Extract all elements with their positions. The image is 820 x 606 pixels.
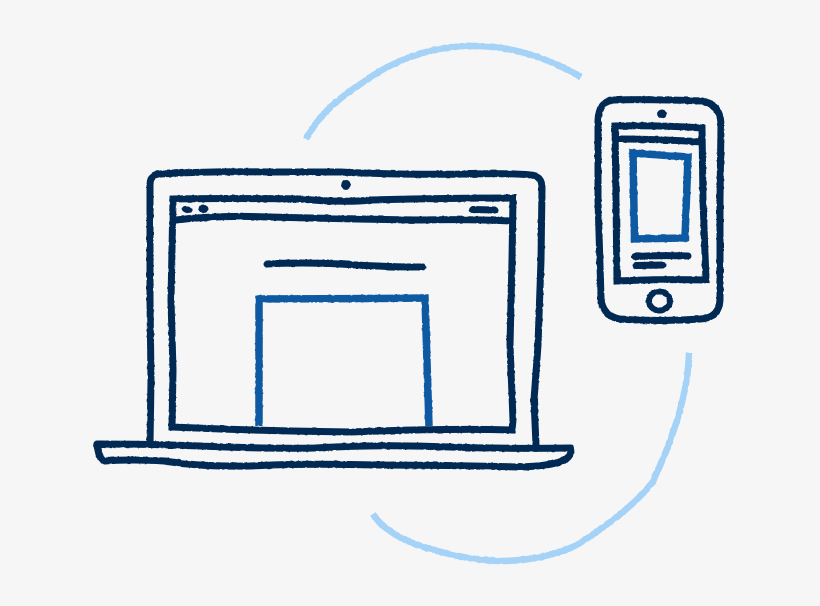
webcam <box>341 180 351 190</box>
button dot 1 <box>181 205 193 214</box>
browser menu bar <box>472 206 495 214</box>
phone title bar line <box>619 139 702 142</box>
phone screen frame <box>615 126 706 281</box>
browser buttons <box>181 205 208 214</box>
laptop <box>97 172 571 467</box>
artwork <box>97 46 721 561</box>
home button <box>649 292 670 310</box>
phone speaker dot <box>657 110 667 118</box>
blue image placeholder <box>633 153 688 239</box>
text line 1 <box>635 252 688 260</box>
headline line <box>267 263 423 267</box>
text line 2 <box>636 262 663 269</box>
browser title bar line <box>176 216 511 221</box>
laptop lid <box>150 172 542 445</box>
phone body <box>598 100 721 321</box>
laptop screen frame <box>171 198 513 432</box>
arrow arc: top sync curve <box>306 46 581 139</box>
phone <box>598 100 721 321</box>
arrow arc: bottom sync curve <box>373 353 689 561</box>
laptop base <box>97 444 571 467</box>
blue image placeholder <box>259 298 429 426</box>
button dot 2 <box>198 205 208 213</box>
